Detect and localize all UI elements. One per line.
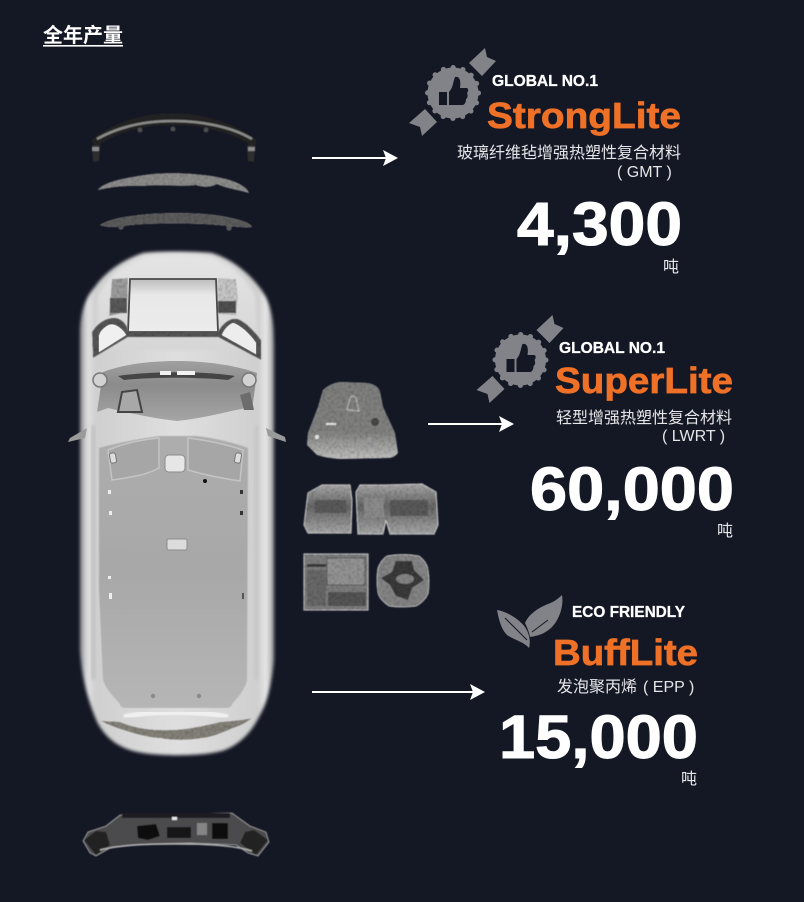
text block: BuffLite: 15,000 [499,703,698,771]
front radiator opening [128,279,218,332]
part: spare wheel cover [377,554,429,607]
text block: SuperLite: 轻型增强热塑性复合材料 [556,409,732,427]
text block: StrongLite: ( GMT ) [617,164,672,181]
text block: SuperLite: ( LWRT ) [662,428,725,445]
text block: SuperLite: SuperLite [555,360,733,401]
icon: SuperLite award badge [476,315,564,403]
headliner [99,436,248,708]
part: engine undercover [307,382,398,459]
text block: BuffLite: ( EPP ) [643,679,694,696]
arrow: BuffLite [312,684,485,700]
text block: BuffLite: ECO FRIENDLY [572,604,685,621]
car body [80,252,274,755]
rear bumper beam [99,718,252,740]
hood [96,256,258,350]
mirrors [68,428,87,442]
part: right floor panel [356,484,438,534]
arrow: SuperLite [428,416,514,432]
icon: eco leaves [497,595,562,648]
part: lower beam [100,213,252,230]
text block: StrongLite [457,73,682,276]
text block: BuffLite: BuffLite [553,632,698,673]
text block: BuffLite: 发泡聚丙烯 [557,679,637,696]
part: front end carrier [83,813,269,856]
text block: BuffLite [499,604,698,788]
text block: SuperLite: 60,000 [530,455,734,523]
text block: StrongLite: GLOBAL NO.1 [492,73,598,90]
front side blocks [92,278,261,360]
car top view [68,252,286,755]
arrow: StrongLite [312,150,398,166]
rear boot curve [124,712,228,717]
text block: SuperLite [530,340,734,540]
side door strips [91,425,96,680]
part: left floor panel [304,485,352,533]
text block: StrongLite: StrongLite [487,95,681,136]
text block: SuperLite: 吨 [717,522,733,540]
text block: StrongLite: 吨 [663,258,679,276]
title: 全年产量 [43,23,123,47]
text block: StrongLite: 玻璃纤维毡增强热塑性复合材料 [457,144,681,162]
text block: StrongLite: 4,300 [517,190,682,258]
part: floor tray [304,554,368,610]
dashboard and windshield [97,361,257,421]
icon: StrongLite award badge [409,48,496,136]
headliner upper panels [108,438,159,480]
part: foam absorber [98,173,249,193]
text block: BuffLite: 吨 [681,770,697,788]
part: top bumper beam [91,113,257,162]
light openings [165,455,185,472]
text block: SuperLite: GLOBAL NO.1 [559,340,665,357]
front structural frame [92,318,261,360]
